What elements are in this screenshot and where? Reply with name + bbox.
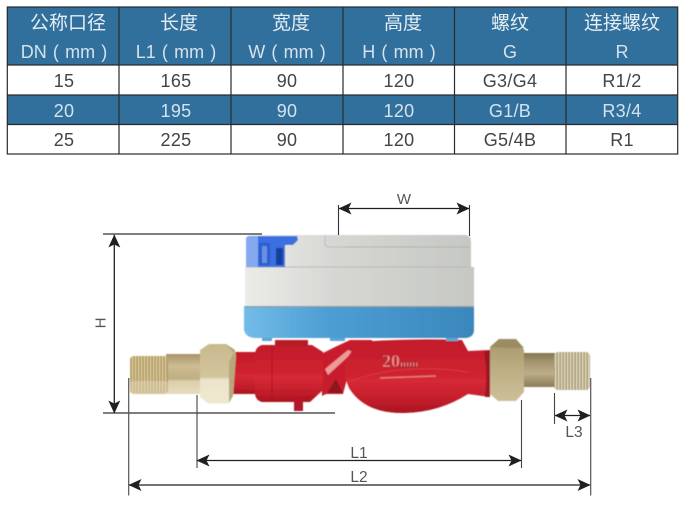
header: nominal diameter: 公称口径	[30, 12, 106, 34]
dimension H	[92, 234, 335, 413]
red meter bowl	[345, 339, 490, 413]
header: connection thread: 连接螺纹	[584, 12, 660, 34]
table row: DN25: 90	[277, 130, 297, 150]
right brass fitting	[524, 353, 556, 387]
table row: DN20: 90	[277, 101, 297, 121]
table row: DN20: G1/B	[489, 101, 531, 121]
header: width: 宽度	[272, 12, 310, 34]
left hex nut	[200, 344, 236, 404]
table row: DN25: 25	[54, 130, 74, 150]
header: G: G	[503, 42, 517, 62]
water meter photo	[130, 235, 590, 413]
table row: DN15: G3/G4	[483, 71, 537, 91]
dimension W	[338, 191, 470, 236]
label L1: L1	[350, 445, 368, 462]
table row: DN20: 20	[54, 101, 74, 121]
meter head: grey lid	[246, 235, 471, 267]
header: L1 unit: L1 ( mm )	[136, 42, 216, 62]
header: W unit: W ( mm )	[248, 42, 326, 62]
table row: DN15: R1/2	[602, 71, 642, 91]
meter head: mounting feet	[262, 336, 458, 341]
table row: DN25: 225	[161, 130, 191, 150]
label W: W	[397, 191, 412, 208]
dimension L2	[129, 378, 591, 496]
specification table	[7, 7, 678, 154]
table row: DN20: 195	[161, 101, 191, 121]
dimension L3	[554, 393, 590, 441]
header: DN unit: DN ( mm )	[21, 42, 107, 62]
table row: DN15: 120	[384, 71, 414, 91]
cast text 20mm: 20mm	[382, 351, 418, 371]
red inlet pipe	[228, 352, 258, 394]
dimension L1	[197, 395, 522, 468]
table row: DN15: 15	[54, 71, 74, 91]
meter head: blue bottom band	[244, 306, 474, 338]
drain stub	[294, 399, 303, 411]
table row: DN15: 90	[277, 71, 297, 91]
table row: DN20: R3/4	[602, 101, 642, 121]
diagonal connector	[321, 340, 372, 396]
header: height: 高度	[384, 12, 422, 34]
table row: DN20	[7, 95, 678, 125]
table row: DN25: 120	[384, 130, 414, 150]
valve post	[275, 340, 308, 346]
table header row	[7, 7, 678, 65]
red collar body	[255, 345, 323, 402]
meter head: grey middle band	[245, 267, 474, 307]
label L2: L2	[350, 469, 368, 486]
table row: DN15: 165	[161, 71, 191, 91]
header: H unit: H ( mm )	[362, 42, 436, 62]
header: thread: 螺纹	[491, 12, 529, 34]
table row: DN25: R1	[610, 130, 634, 150]
table row: DN15	[7, 65, 678, 95]
table row: DN25	[7, 125, 678, 154]
blue transparent window	[246, 236, 298, 267]
right hex nut	[490, 339, 524, 401]
table row: DN25: G5/4B	[484, 130, 536, 150]
left brass fitting	[130, 354, 201, 394]
header: R: R	[616, 42, 628, 62]
label H: H	[92, 318, 110, 328]
table row: DN20: 120	[384, 101, 414, 121]
header: length: 长度	[160, 12, 198, 34]
label L3: L3	[565, 424, 583, 441]
